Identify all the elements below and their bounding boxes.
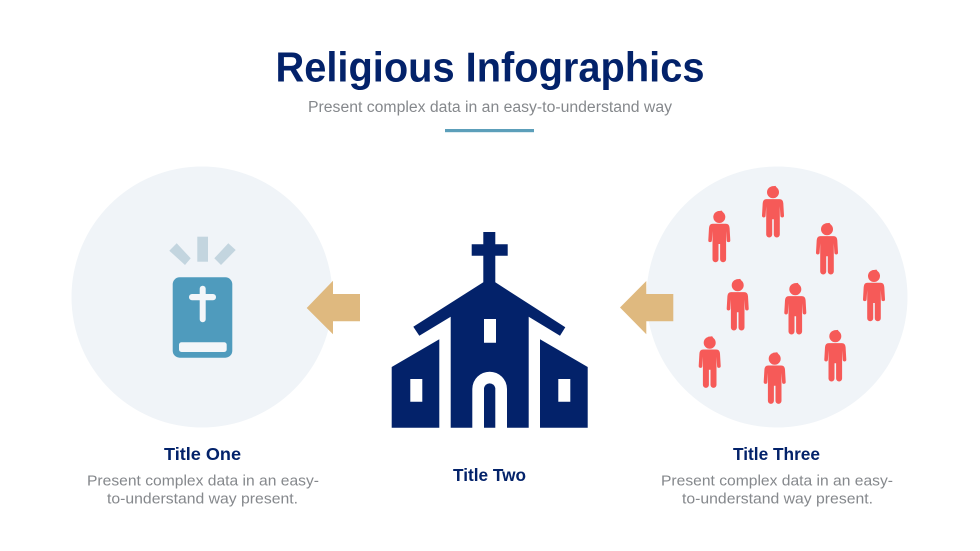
panel: title three bbox=[646, 166, 908, 508]
description: title three bbox=[661, 473, 893, 508]
title underline bbox=[445, 129, 534, 132]
circle background left bbox=[72, 166, 332, 428]
heading: title one: Title One bbox=[164, 444, 241, 464]
description: title one: Present complex data in an easy- bbox=[87, 473, 319, 490]
arrow: title three to church bbox=[620, 281, 673, 334]
arrow: church to title one bbox=[307, 281, 360, 334]
icon: church bbox=[392, 232, 588, 428]
description: title three: to-understand way present. bbox=[682, 490, 873, 508]
icon: bible bbox=[169, 237, 236, 358]
icon: group of people bbox=[699, 186, 885, 404]
description: title one: to-understand way present. bbox=[107, 490, 298, 508]
subtitle: Present complex data in an easy-to-understand way bbox=[308, 99, 672, 116]
panel: title two bbox=[392, 232, 588, 485]
circle background right bbox=[646, 166, 908, 428]
description: title three: Present complex data in an easy- bbox=[661, 473, 893, 490]
heading: title three: Title Three bbox=[733, 444, 820, 464]
panel: title one bbox=[72, 166, 332, 508]
heading: title two: Title Two bbox=[453, 465, 526, 485]
title: Religious Infographics bbox=[276, 44, 704, 90]
description: title one bbox=[87, 473, 319, 508]
